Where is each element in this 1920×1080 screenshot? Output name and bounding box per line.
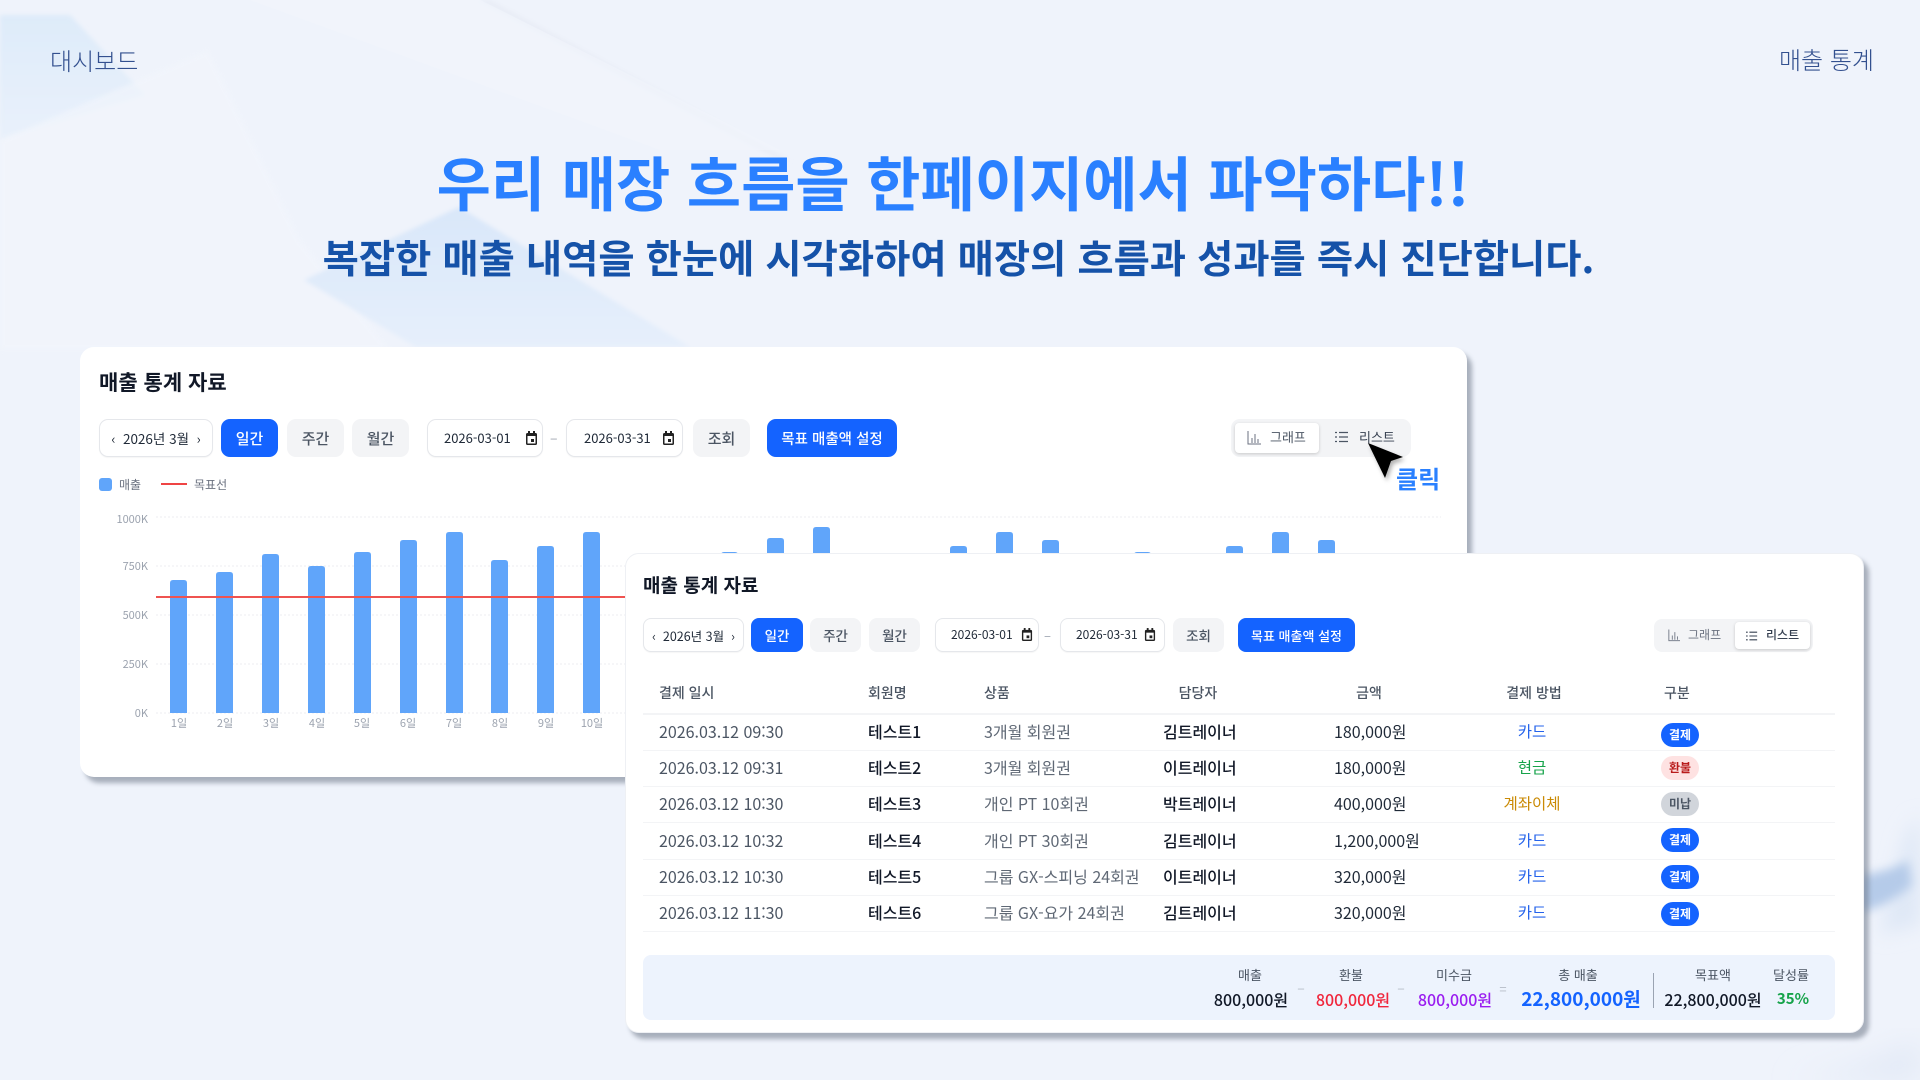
table row 3: 테스트3 [868, 791, 921, 815]
table row 4 [643, 823, 1835, 860]
legend [99, 476, 227, 493]
table row 6: 테스트6 [868, 900, 921, 924]
summary: equals: = [1499, 979, 1507, 998]
button: weekly [287, 419, 344, 457]
toggle: graph [1235, 423, 1319, 453]
button: search: 조회 [1186, 625, 1211, 645]
y axis labels: 750K [123, 558, 149, 574]
button: daily [221, 419, 278, 457]
table row 4: 카드 [1518, 829, 1546, 851]
table row 6: 그룹 GX-요가 24회권 [984, 900, 1125, 924]
table row 2: 3개월 회원권 [984, 755, 1071, 779]
summary: target: 목표액 [1695, 965, 1731, 984]
x axis labels [171, 715, 603, 731]
summary: achievement [1773, 965, 1809, 1009]
button: monthly [352, 419, 409, 457]
date separator: – [550, 428, 558, 448]
start date: 2026-03-01 [951, 626, 1013, 643]
table row 5 [643, 859, 1835, 896]
table row 1: 3개월 회원권 [984, 719, 1071, 743]
table row 6: 결제 [1669, 905, 1691, 922]
table row 2: 환불 [1669, 759, 1691, 776]
button: search: 조회 [708, 428, 735, 448]
breadcrumb: sales statistics: 매출 통계 [1779, 41, 1874, 76]
table row 3: 2026.03.12 10:30 [659, 791, 783, 815]
table row 4: 테스트4 [868, 828, 921, 852]
summary: minus: − [1397, 979, 1405, 998]
start date [935, 618, 1039, 652]
x axis labels: 2일 [217, 715, 233, 731]
target line [156, 596, 636, 598]
bars [170, 527, 1335, 713]
end date [1060, 618, 1165, 652]
table row 4: 개인 PT 30회권 [984, 828, 1089, 852]
month selector [643, 618, 744, 652]
x axis labels: 7일 [446, 715, 462, 731]
table row 1: 테스트1 [868, 719, 921, 743]
summary: achievement: 달성률 [1773, 965, 1809, 984]
table header: 회원명 [868, 683, 907, 703]
table header: 구분 [1664, 683, 1690, 703]
table row 5: 이트레이너 [1163, 864, 1237, 888]
summary: achievement: 35% [1777, 988, 1809, 1009]
summary: sales [1214, 965, 1288, 1011]
button: weekly [810, 618, 861, 652]
end date: 2026-03-31 [1076, 626, 1138, 643]
table row 2 [643, 750, 1835, 787]
summary bar [643, 955, 1835, 1020]
x axis labels: 10일 [581, 715, 603, 731]
x axis labels: 1일 [171, 715, 187, 731]
toggle: list: 리스트 [1359, 427, 1395, 446]
y axis labels: 1000K [116, 511, 149, 527]
button: daily: 일간 [765, 625, 789, 645]
legend text: target: 목표선 [194, 476, 227, 493]
summary: refund: 800,000원 [1316, 987, 1390, 1011]
end date [566, 419, 683, 457]
panel heading: 매출 통계 자료 [99, 367, 227, 397]
x axis labels: 9일 [538, 715, 554, 731]
button: monthly: 월간 [367, 428, 394, 448]
toggle: list [1335, 427, 1395, 446]
y axis labels: 500K [123, 607, 149, 623]
table row 6 [643, 895, 1835, 932]
table row 1: 김트레이너 [1163, 719, 1237, 743]
toggle: graph: 그래프 [1270, 427, 1306, 446]
table row 1: 180,000원 [1334, 719, 1406, 743]
button: daily: 일간 [236, 428, 263, 448]
x axis labels: 3일 [263, 715, 279, 731]
table row 1 [643, 714, 1835, 751]
table row 4: 결제 [1669, 831, 1691, 848]
x axis labels: 4일 [309, 715, 325, 731]
table row 3: 계좌이체 [1503, 792, 1561, 814]
x axis labels: 8일 [492, 715, 508, 731]
summary: minus: − [1297, 979, 1305, 998]
view toggle [1231, 419, 1411, 457]
button: search [693, 419, 750, 457]
table row 3: 미납 [1669, 795, 1691, 812]
table row 3: 개인 PT 10회권 [984, 791, 1089, 815]
toggle: list [1735, 622, 1810, 649]
table row 5: 테스트5 [868, 864, 921, 888]
button: target setting [767, 419, 897, 457]
click label: 클릭 [1396, 460, 1440, 495]
summary: total [1521, 965, 1641, 1012]
summary: refund: 환불 [1339, 965, 1363, 984]
subtitle: 복잡한 매출 내역을 한눈에 시각화하여 매장의 흐름과 성과를 즉시 진단합니다. [323, 228, 1594, 285]
panel: list view [625, 553, 1864, 1033]
summary: sales: 매출 [1238, 965, 1262, 984]
button: weekly: 주간 [302, 428, 329, 448]
button: monthly: 월간 [882, 625, 907, 645]
table row 3: 박트레이너 [1163, 791, 1237, 815]
table header: 상품 [984, 683, 1010, 703]
month selector: ‹ 2026년 3월 › [111, 428, 201, 448]
summary: unpaid: 800,000원 [1418, 987, 1492, 1011]
summary: target [1664, 965, 1762, 1011]
cursor arrow [1368, 443, 1405, 481]
toggle: graph: 그래프 [1688, 626, 1721, 643]
table row 6: 2026.03.12 11:30 [659, 900, 783, 924]
end date: 2026-03-31 [584, 428, 651, 447]
summary: unpaid: 미수금 [1436, 965, 1472, 984]
y axis labels: 250K [123, 656, 149, 672]
table row 5: 결제 [1669, 868, 1691, 885]
date separator: – [1044, 625, 1051, 644]
summary: total: 총 매출 [1558, 965, 1598, 984]
summary: target: 22,800,000원 [1664, 987, 1762, 1011]
legend swatch: sales [99, 478, 112, 491]
start date [427, 419, 543, 457]
summary: refund [1316, 965, 1390, 1011]
summary divider [1653, 973, 1654, 1008]
table header: 결제 방법 [1506, 683, 1562, 703]
table row 6: 김트레이너 [1163, 900, 1237, 924]
summary: unpaid [1418, 965, 1492, 1011]
table row 2: 이트레이너 [1163, 755, 1237, 779]
table row 6: 320,000원 [1334, 900, 1406, 924]
view toggle [1654, 619, 1813, 652]
summary: total: 22,800,000원 [1521, 985, 1641, 1012]
x axis labels: 5일 [354, 715, 370, 731]
button: search [1173, 618, 1224, 652]
table row 1: 카드 [1518, 720, 1546, 742]
x axis labels: 6일 [400, 715, 416, 731]
table row 5: 그룹 GX-스피닝 24회권 [984, 864, 1140, 888]
table row 4: 김트레이너 [1163, 828, 1237, 852]
table row 3: 400,000원 [1334, 791, 1406, 815]
table row 2: 2026.03.12 09:31 [659, 755, 783, 779]
table row 3 [643, 786, 1835, 823]
table row 5: 320,000원 [1334, 864, 1406, 888]
table header: 결제 일시 [659, 683, 714, 703]
table header: 금액 [1356, 683, 1382, 703]
button: target setting [1238, 618, 1355, 652]
button: daily [751, 618, 803, 652]
legend text: sales: 매출 [119, 476, 141, 493]
button: monthly [869, 618, 920, 652]
table header: 담당자 [1179, 683, 1217, 703]
legend line: target [161, 483, 187, 485]
table row 1: 2026.03.12 09:30 [659, 719, 783, 743]
y axis labels [116, 511, 149, 721]
y axis labels: 0K [135, 705, 149, 721]
button: target setting: 목표 매출액 설정 [1251, 626, 1342, 644]
table row 4: 1,200,000원 [1334, 828, 1420, 852]
table row 2: 180,000원 [1334, 755, 1406, 779]
breadcrumb: dashboard: 대시보드 [50, 42, 138, 77]
month selector [99, 419, 213, 457]
toggle: graph [1668, 626, 1721, 643]
button: target setting: 목표 매출액 설정 [781, 428, 883, 448]
table header [643, 553, 1835, 715]
panel heading: 매출 통계 자료 [643, 571, 759, 598]
table row 1: 결제 [1669, 726, 1691, 743]
table row 2: 테스트2 [868, 755, 921, 779]
table row 4: 2026.03.12 10:32 [659, 828, 783, 852]
start date: 2026-03-01 [444, 428, 511, 447]
summary: sales: 800,000원 [1214, 987, 1288, 1011]
month selector: ‹ 2026년 3월 › [652, 626, 735, 644]
panel: graph view [80, 347, 1467, 777]
table row 2: 현금 [1518, 756, 1546, 778]
table row 5: 카드 [1518, 865, 1546, 887]
table row 6: 카드 [1518, 901, 1546, 923]
toggle: list: 리스트 [1766, 626, 1799, 643]
bar chart [116, 511, 1441, 731]
button: weekly: 주간 [823, 625, 848, 645]
table row 5: 2026.03.12 10:30 [659, 864, 783, 888]
title: 우리 매장 흐름을 한페이지에서 파악하다!! [437, 138, 1469, 223]
